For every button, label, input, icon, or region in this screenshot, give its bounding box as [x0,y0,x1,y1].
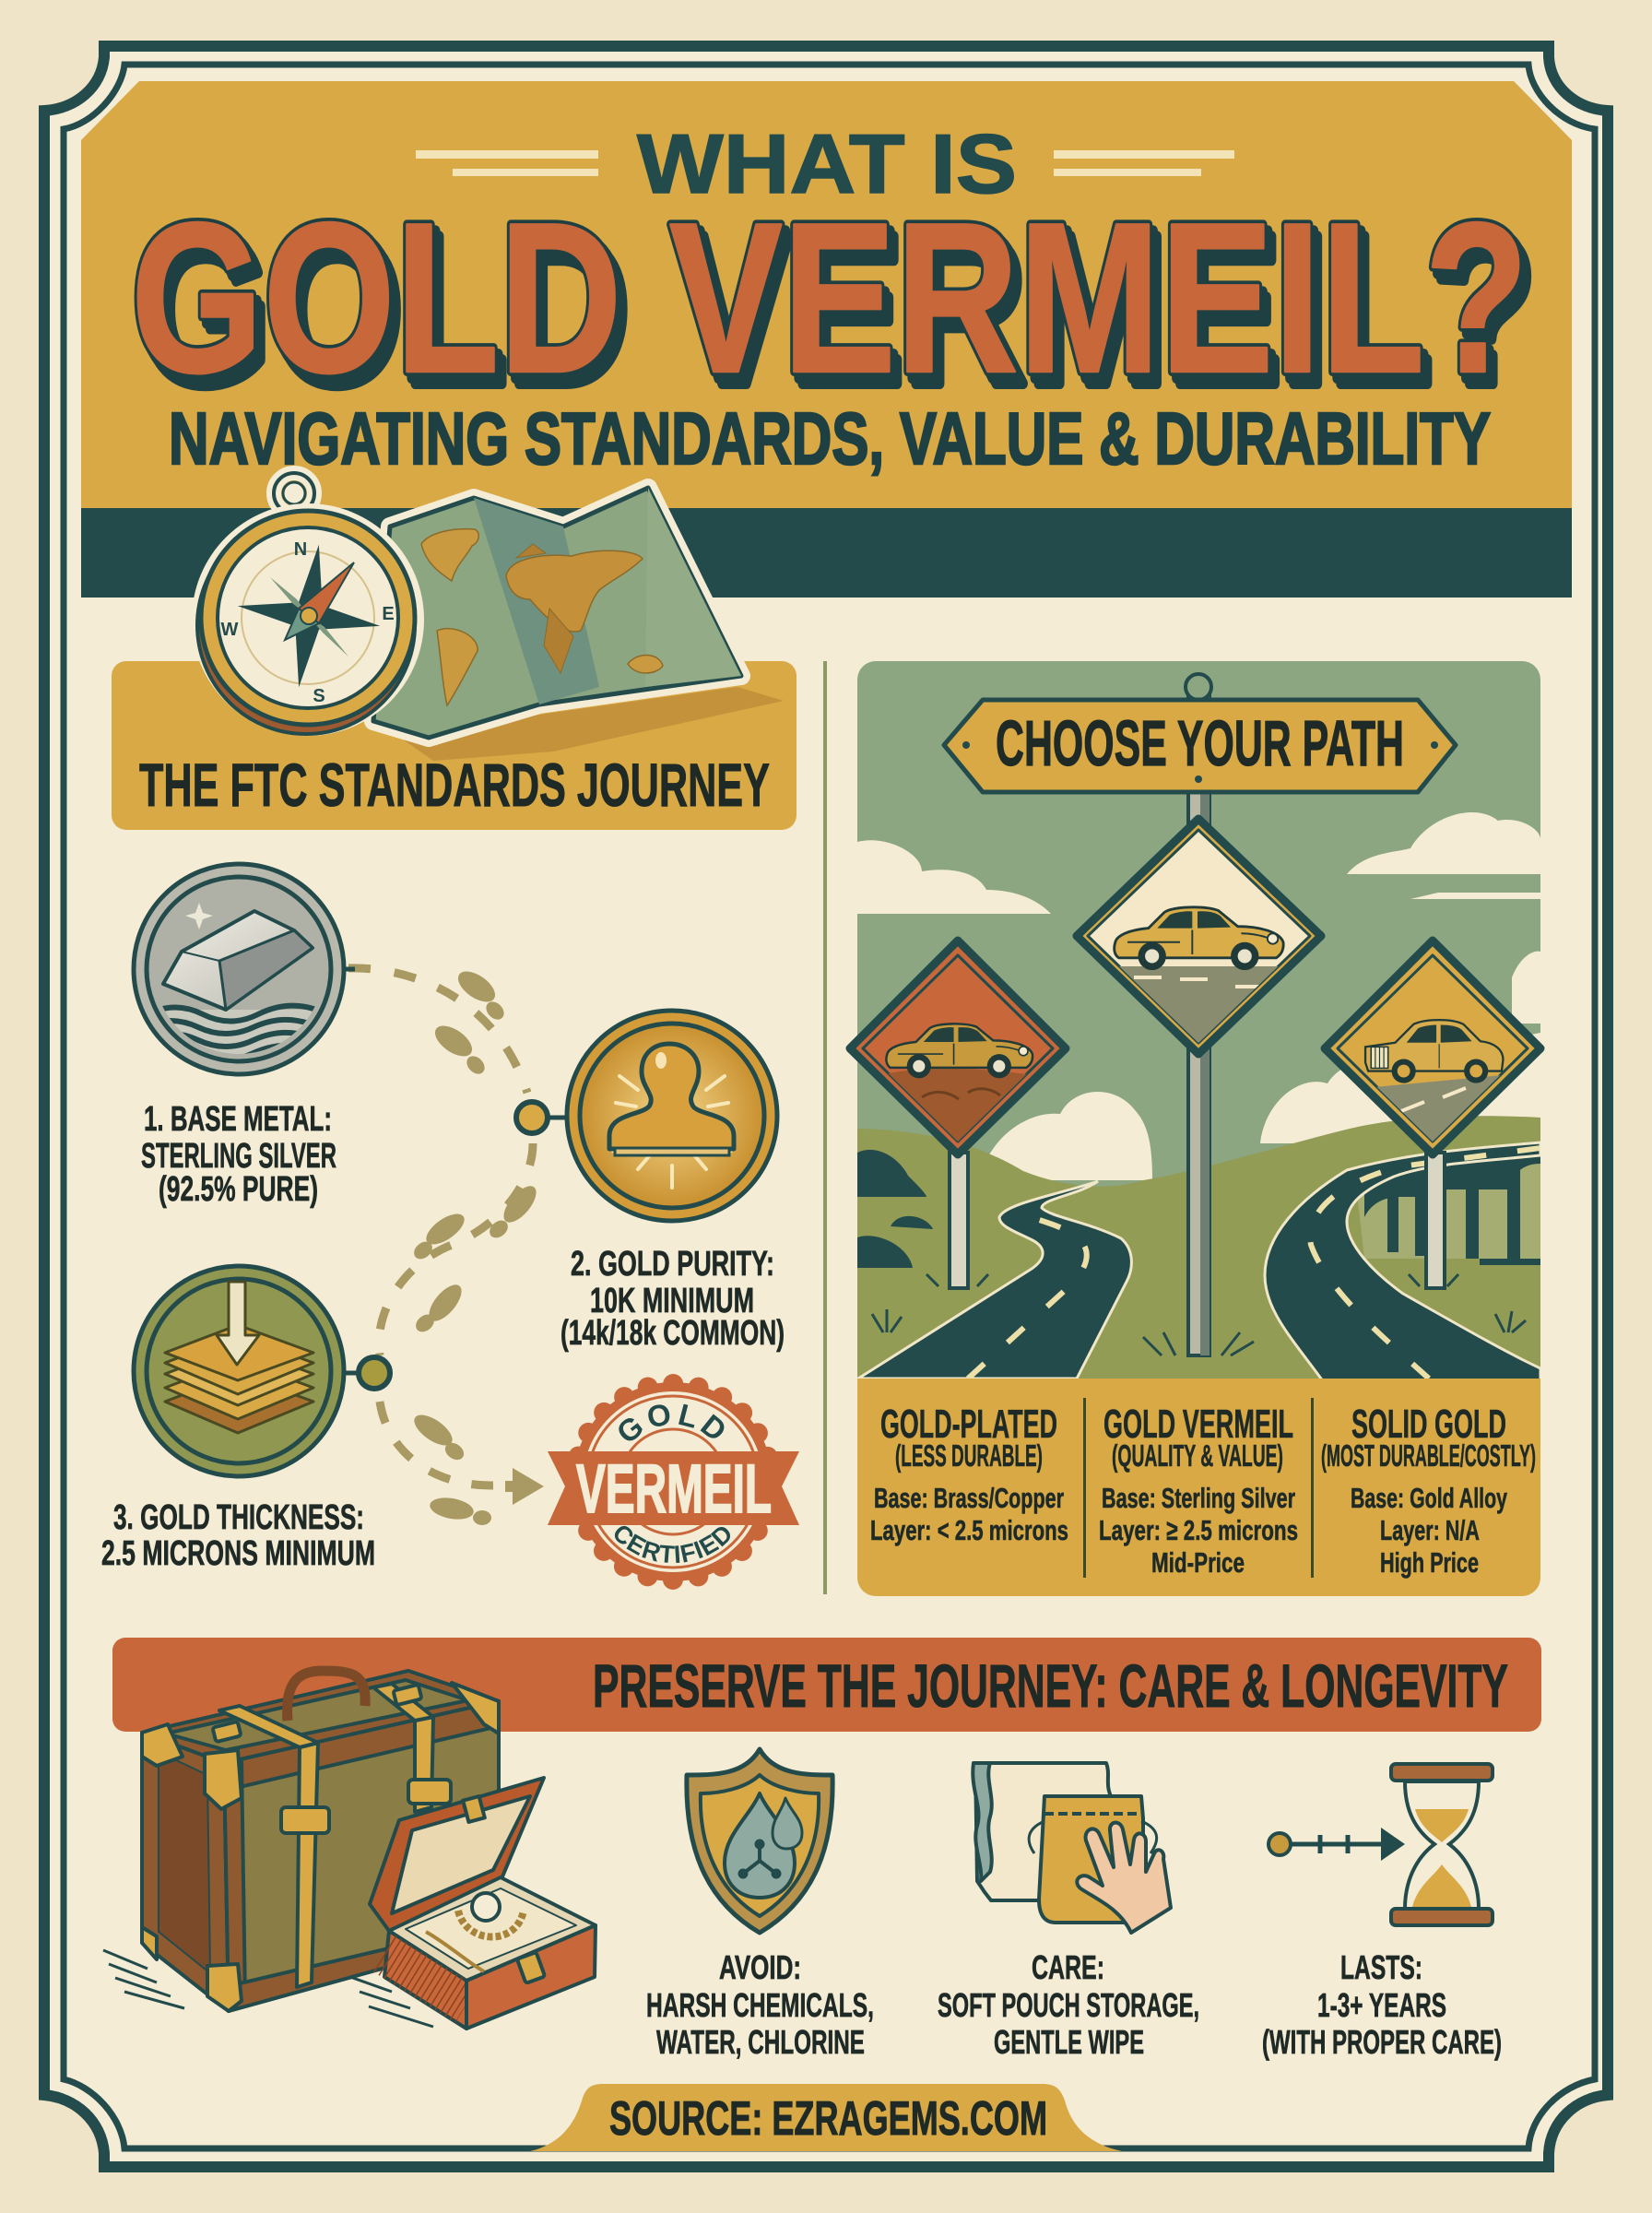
column: gold vermeil: GOLD VERMEIL [1103,1402,1293,1447]
label: CARE: [1032,1948,1104,1986]
source tab: SOURCE: EZRAGEMS.COM [609,2092,1047,2146]
label: 2. GOLD PURITY: [571,1245,774,1284]
label: LASTS: [1340,1948,1422,1986]
column: gold-plated [870,1402,1068,1546]
icon: compass: E [382,604,395,624]
sky [857,661,1540,1187]
column: gold vermeil [1099,1402,1298,1579]
header banner [81,81,1572,598]
grass tufts [872,1274,1526,1355]
bushes [857,1150,1540,1268]
title: what is: WHAT IS [637,118,1017,211]
roads [858,1142,1540,1380]
label [938,1948,1199,2061]
label: GENTLE WIPE [994,2023,1144,2061]
sign posts [950,674,1445,1355]
icon: jewelry box [370,1778,596,2029]
column: gold vermeil: Base: Sterling Silver [1102,1482,1295,1514]
arrowhead [505,1468,544,1505]
badge: gold vermeil certified: VERMEIL [576,1450,772,1527]
comparison table background [857,1379,1540,1596]
label: 1. BASE METAL: [144,1100,332,1139]
panel: FTC heading: THE FTC STANDARDS JOURNEY [139,751,770,819]
icon: compass: N [294,539,307,560]
sign: choose your path: CHOOSE YOUR PATH [996,707,1404,779]
icon: gold stamp [516,1011,777,1221]
column: gold-plated: (LESS DURABLE) [895,1438,1043,1473]
label: SOFT POUCH STORAGE, [938,1986,1199,2024]
dashed route [348,968,533,1485]
label [560,1245,785,1353]
icon: compass: S [313,686,325,706]
step 3: gold thickness [101,1266,390,1573]
column: gold vermeil: Layer: ≥ 2.5 microns [1099,1514,1298,1546]
column: solid gold: SOLID GOLD [1351,1402,1506,1447]
icon: shield with drop [687,1749,832,1933]
care heading bar [112,1638,1541,1732]
sign: gold-plated road [850,941,1066,1154]
icon: compass [192,473,424,736]
source tab [530,2084,1122,2151]
label: 2.5 MICRONS MINIMUM [101,1534,375,1573]
icon: gold layers [134,1266,390,1476]
column: gold-plated: Base: Brass/Copper [874,1482,1064,1514]
item: avoid [646,1749,874,2061]
label [646,1948,874,2061]
column: solid gold: Base: Gold Alloy [1351,1482,1508,1514]
icon: pouch and hand [973,1763,1171,1933]
sign: choose your path [944,700,1456,792]
panel: FTC heading [112,661,796,830]
item: care [938,1763,1199,2061]
icon: hourglass with arrow [1268,1764,1493,1925]
label: (14k/18k COMMON) [560,1314,785,1353]
badge: gold vermeil certified: GOLD [619,1403,725,1440]
badge: gold vermeil certified [548,1374,799,1590]
sign: gold vermeil road [1069,819,1328,1059]
label: (WITH PROPER CARE) [1262,2023,1502,2061]
badge: gold vermeil certified: CERTIFIED [614,1525,730,1563]
label [101,1498,375,1573]
column: gold-plated: GOLD-PLATED [880,1402,1057,1447]
icon: silver bar [134,864,355,1074]
label: 1-3+ YEARS [1317,1986,1446,2024]
label: (92.5% PURE) [159,1170,318,1209]
label: STERLING SILVER [141,1137,336,1176]
column: solid gold [1321,1402,1536,1579]
step 2: gold purity [516,1011,785,1353]
item: lasts [1262,1764,1502,2061]
title: what is [416,118,1234,211]
overpass [1358,1156,1540,1259]
label: 3. GOLD THICKNESS: [113,1498,364,1537]
label: 10K MINIMUM [590,1282,754,1320]
journey path [348,965,544,1525]
column: gold vermeil: Mid-Price [1151,1546,1245,1579]
column: solid gold: High Price [1380,1546,1479,1579]
label [1262,1948,1502,2061]
label [141,1100,336,1209]
clouds [857,812,1540,1180]
label: HARSH CHEMICALS, [646,1986,874,2024]
divider [823,661,827,1594]
column: gold-plated: Layer: < 2.5 microns [870,1514,1068,1546]
hills [857,1116,1540,1380]
label: WATER, CHLORINE [656,2023,865,2061]
icon: folded map [373,488,741,738]
panel: choose your path [857,661,1540,1596]
column: solid gold: Layer: N/A [1380,1514,1480,1546]
label: AVOID: [719,1948,801,1986]
footprints [409,965,542,1525]
step 1: base metal [134,864,355,1209]
comparison table [870,1398,1536,1579]
icon: suitcase [103,1671,499,2027]
icon: compass: W [221,620,239,640]
column: gold vermeil: (QUALITY & VALUE) [1112,1438,1283,1473]
sign: solid gold road [1325,941,1540,1154]
